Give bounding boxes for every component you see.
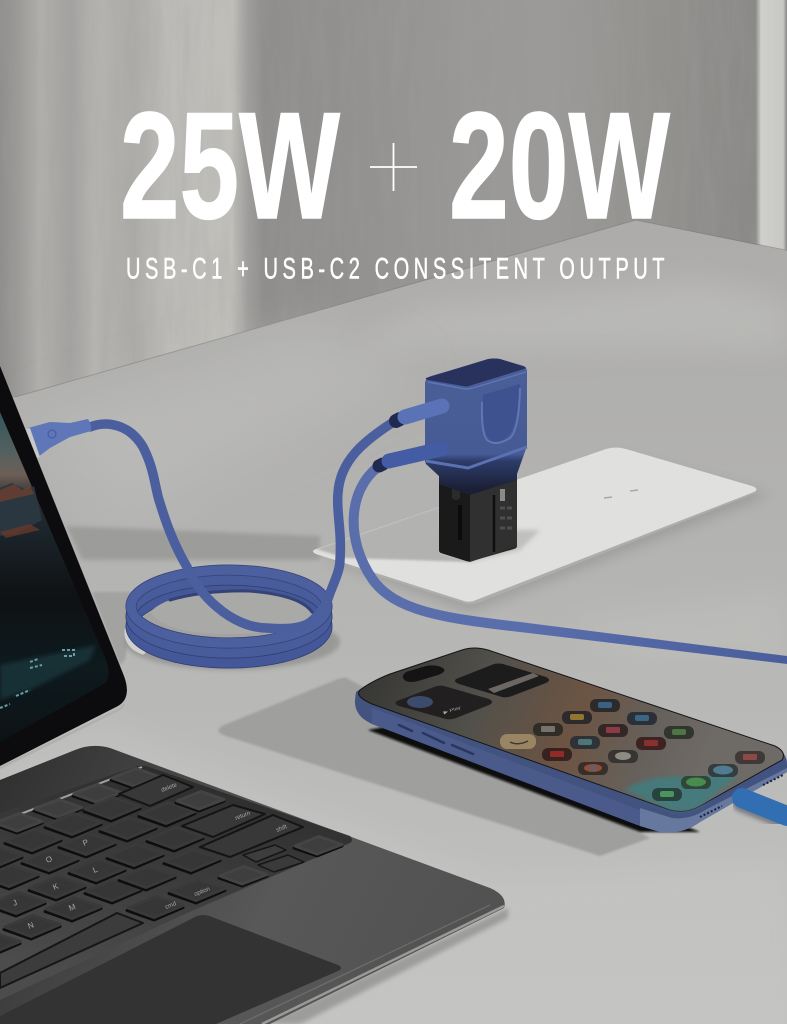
key labels: option xyxy=(194,886,211,898)
key labels: N xyxy=(26,920,35,931)
key labels: shift xyxy=(276,824,288,834)
charger light edge xyxy=(428,372,526,389)
charger curved recess xyxy=(482,384,520,443)
base shadow on table xyxy=(265,908,508,1024)
key well xyxy=(0,766,352,1000)
charger band xyxy=(426,447,527,468)
phone xyxy=(355,648,787,833)
phone frame xyxy=(355,648,787,833)
headline: 20W: 20W xyxy=(449,81,670,251)
tablet screen xyxy=(0,412,109,742)
tablet body xyxy=(0,366,127,766)
key labels: L xyxy=(91,865,99,875)
charger shadow on tray xyxy=(440,530,540,562)
key labels xyxy=(11,782,288,931)
trackpad xyxy=(0,915,341,1024)
coil loops xyxy=(131,570,327,663)
keys xyxy=(0,768,342,988)
headline xyxy=(120,81,670,251)
white tray xyxy=(313,448,770,612)
clear table inside coil xyxy=(150,592,312,634)
white reflection strip xyxy=(0,767,142,822)
charger black plug block xyxy=(439,470,517,562)
cable coil xyxy=(124,570,340,670)
charger top face xyxy=(426,358,526,386)
key labels: cmd xyxy=(165,901,177,911)
phone speaker grille xyxy=(700,775,783,817)
widget: now playing xyxy=(395,686,492,719)
phone contact shadow xyxy=(368,720,700,832)
dynamic island xyxy=(403,665,444,682)
charger blue body xyxy=(425,358,527,495)
key labels: return xyxy=(235,811,251,822)
key labels: J xyxy=(11,898,18,908)
lower USB-C connector xyxy=(379,449,441,466)
phone shadow area on table xyxy=(218,678,650,856)
tablet silver edge xyxy=(0,704,124,768)
cable 2 to the right xyxy=(354,467,787,664)
keyboard base xyxy=(0,746,508,1024)
headline: plus sign xyxy=(370,143,417,191)
light disc edge under coil xyxy=(127,630,143,652)
cable 1 from tablet to charger xyxy=(90,421,395,629)
phone side buttons xyxy=(399,725,473,754)
charger xyxy=(425,358,540,562)
coil shadow xyxy=(124,614,340,670)
subheading: USB-C1 + USB-C2 CONSSITENT OUTPUT xyxy=(126,253,665,286)
upper USB-C connector xyxy=(396,406,442,421)
table surface xyxy=(0,220,787,1024)
base body xyxy=(0,746,505,1024)
headline: 25W: 25W xyxy=(120,81,340,251)
phone side highlight xyxy=(372,708,640,826)
widget: now playing: ▶ Play xyxy=(443,705,462,716)
key labels: M xyxy=(67,902,77,913)
phone USB-C cable end xyxy=(742,798,787,820)
cable 1 tablet connector xyxy=(26,419,91,458)
wide keys xyxy=(119,775,193,806)
key labels: delete xyxy=(161,782,179,794)
app icons xyxy=(500,699,765,801)
key labels: P xyxy=(81,838,90,848)
key labels: K xyxy=(51,881,60,892)
key labels: O xyxy=(44,854,54,865)
hole shading on table xyxy=(144,594,312,638)
phone screen teal glow xyxy=(625,772,738,811)
widget: search xyxy=(455,664,549,697)
background wall xyxy=(0,0,787,420)
tablet xyxy=(0,366,127,768)
phone screen xyxy=(358,648,783,811)
base front edge xyxy=(262,906,504,1024)
screen mountains and lights xyxy=(0,483,96,708)
